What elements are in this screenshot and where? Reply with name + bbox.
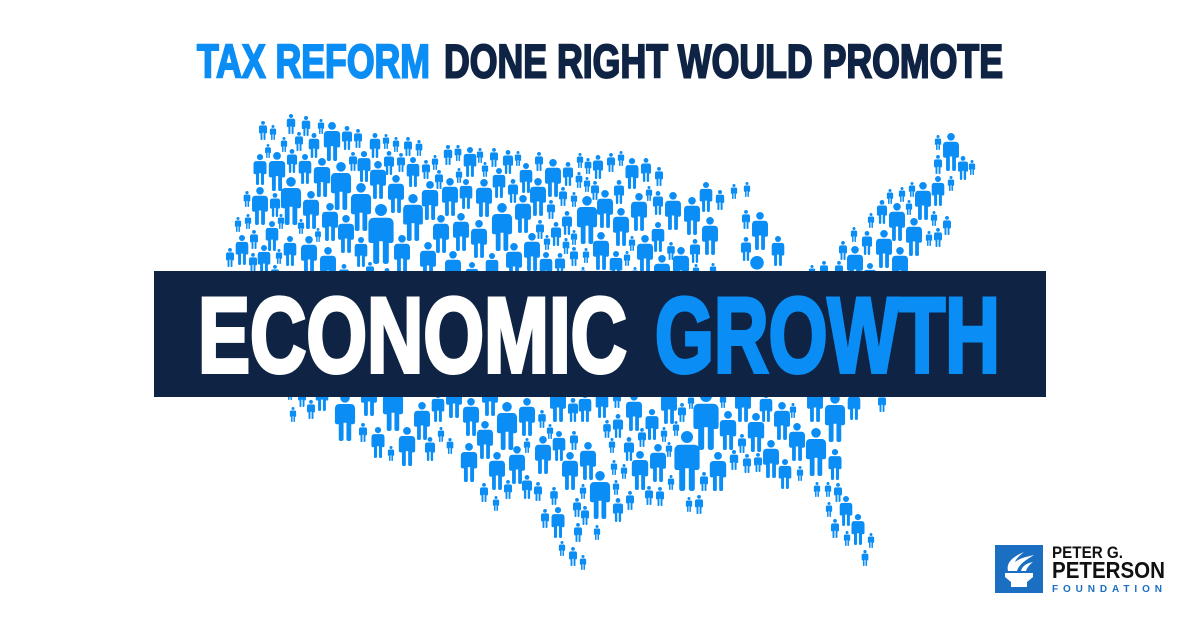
map of the United States made of people icons [226, 114, 975, 570]
title: DONE RIGHT WOULD PROMOTE [444, 34, 1003, 88]
title: TAX REFORM [197, 34, 430, 88]
logo: Peter G. Peterson Foundation: FOUNDATION [1052, 584, 1162, 595]
banner: economic growth: ECONOMIC [198, 275, 627, 395]
logo: Peter G. Peterson Foundation: PETER G. [1052, 543, 1123, 562]
logo: Peter G. Peterson Foundation: PETERSON [1052, 557, 1165, 583]
logo: Peter G. Peterson Foundation [995, 543, 1165, 595]
banner: economic growth [154, 271, 1046, 397]
banner: economic growth: GROWTH [655, 275, 1000, 395]
title [197, 34, 1003, 88]
